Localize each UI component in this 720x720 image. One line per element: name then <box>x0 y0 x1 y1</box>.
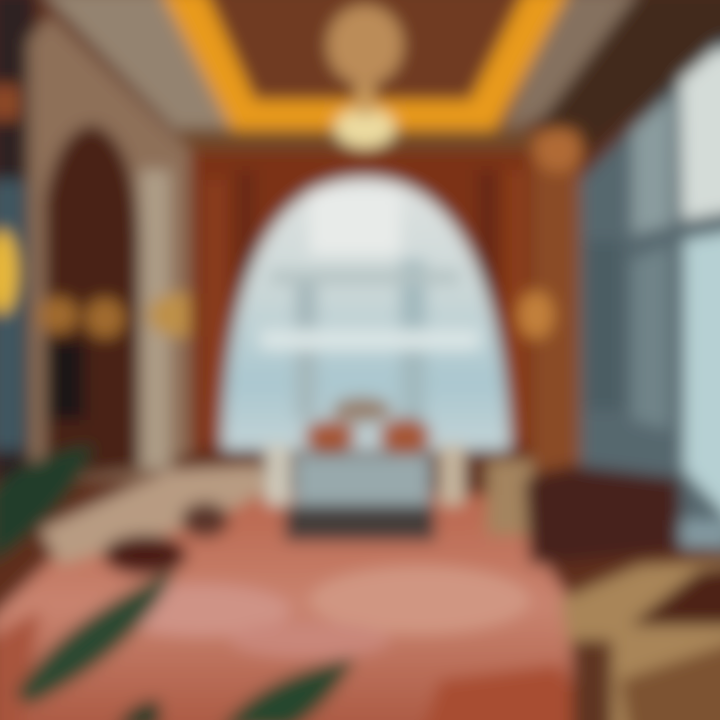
left sofa <box>40 465 270 575</box>
central table with flowers <box>266 397 464 541</box>
central arched window <box>222 178 510 450</box>
right window <box>580 40 720 550</box>
floor <box>0 495 600 720</box>
ceiling coffer with golden border <box>160 0 570 148</box>
plants <box>0 445 355 720</box>
right sofas <box>487 460 720 720</box>
curtains <box>190 128 582 470</box>
left wall and arch <box>0 0 212 480</box>
ceiling <box>40 0 720 158</box>
